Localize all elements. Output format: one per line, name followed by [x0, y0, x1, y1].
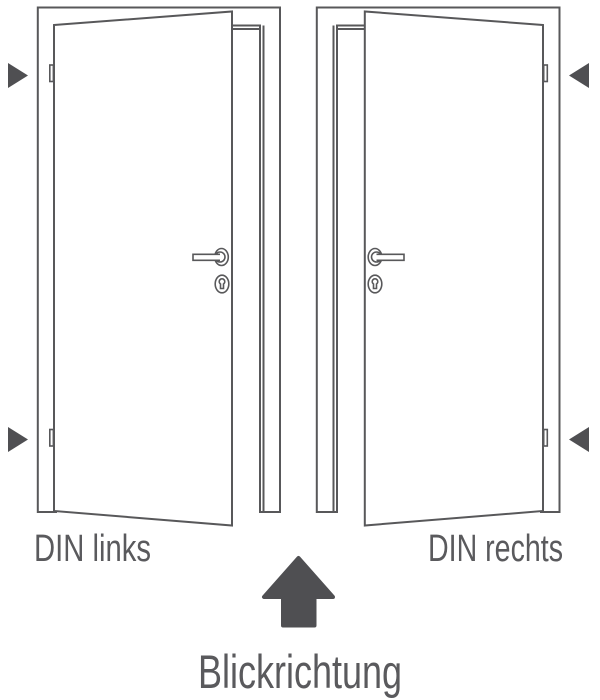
left door leaf: [54, 12, 232, 526]
left door frame: [38, 8, 280, 512]
hinge marker: upper left triangle: [8, 63, 28, 88]
right door lower hinge: [544, 430, 547, 446]
label: Blickrichtung: Blickrichtung: [198, 645, 402, 698]
label: DIN links: DIN links: [34, 528, 151, 570]
left door upper hinge: [50, 65, 53, 82]
left door diagram: DIN links: [38, 8, 280, 526]
arrow: viewing direction: [264, 558, 333, 626]
right door keyhole: [368, 275, 382, 293]
left door keyhole: [215, 275, 229, 293]
hinge marker: lower left triangle: [8, 427, 28, 452]
left door handle: [193, 248, 228, 266]
hinge marker: upper right triangle: [569, 63, 589, 88]
right door leaf: [365, 12, 543, 526]
right door upper hinge: [544, 65, 547, 82]
right door handle: [368, 248, 404, 266]
left door lower hinge: [50, 430, 53, 446]
right door frame: [317, 8, 560, 512]
right door diagram: DIN rechts: [317, 8, 560, 526]
hinge marker: lower right triangle: [569, 427, 589, 452]
